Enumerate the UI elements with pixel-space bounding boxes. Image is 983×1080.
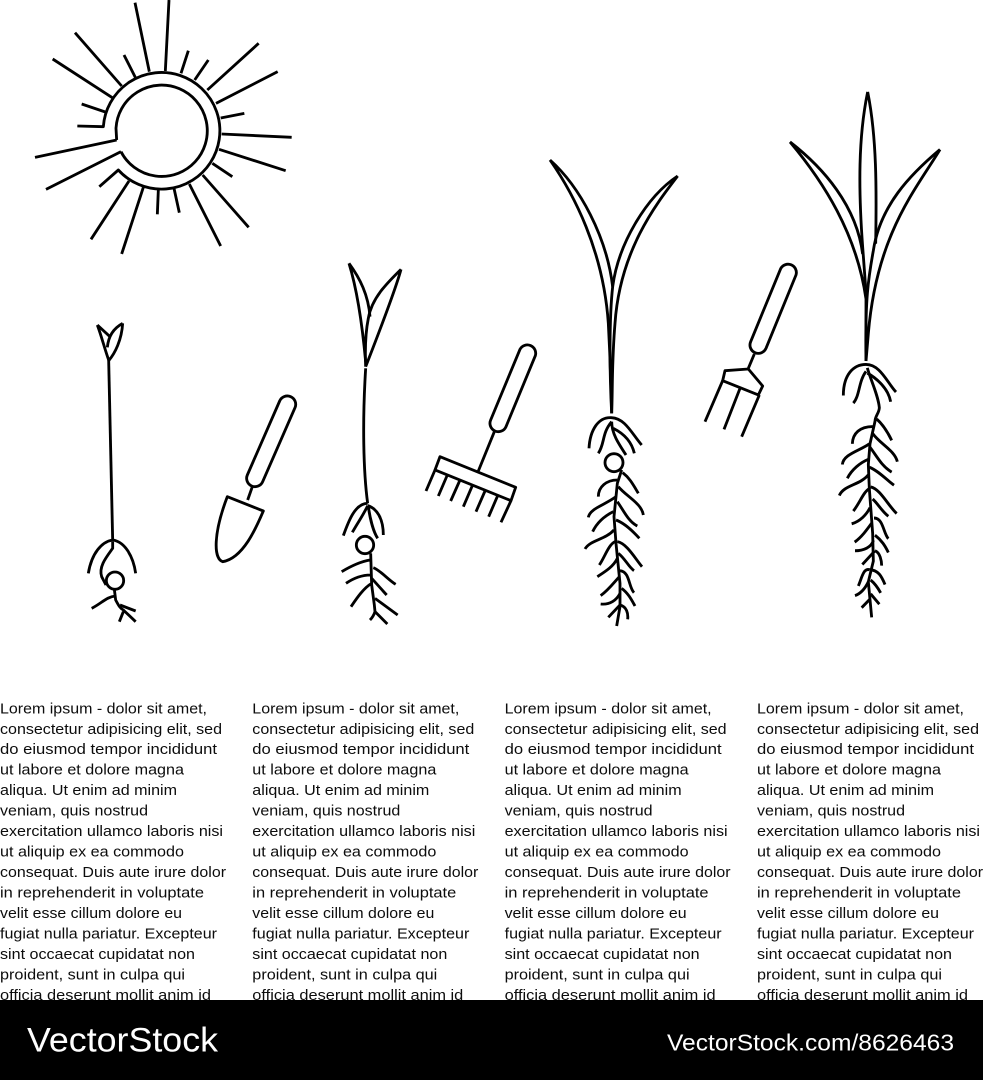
text block: column 4: do eiusmod tempor incididunt — [757, 741, 975, 758]
text block: column 4: consectetur adipisicing elit, sed — [757, 721, 979, 738]
text block: column 2: do eiusmod tempor incididunt — [252, 741, 470, 758]
text block: column 4: officia deserunt mollit anim id — [757, 987, 968, 1004]
text block: column 4: exercitation ullamco laboris nisi — [757, 823, 980, 840]
text block: column 1: do eiusmod tempor incididunt — [0, 741, 218, 758]
text block: column 1: ut aliquip ex ea commodo — [0, 844, 184, 860]
text block: column 1: Lorem ipsum - dolor sit amet, — [0, 700, 207, 717]
footer bar — [0, 1000, 983, 1080]
text block: column 1: in reprehenderit in voluptate — [0, 884, 204, 901]
text block: column 1: consectetur adipisicing elit, sed — [0, 721, 222, 738]
text block: column 1 — [0, 700, 226, 1004]
text block: column 4 — [757, 700, 983, 1004]
text block: column 1: proident, sunt in culpa qui — [0, 966, 185, 983]
text block: column 3: ut aliquip ex ea commodo — [505, 844, 689, 860]
text block: column 4: velit esse cillum dolore eu — [757, 905, 939, 922]
text block: column 3: veniam, quis nostrud — [505, 803, 653, 820]
icon: rake — [426, 345, 536, 522]
text block: column 3: ut labore et dolore magna — [505, 762, 689, 779]
text block: column 2: officia deserunt mollit anim id — [252, 987, 463, 1004]
text block: column 2: consectetur adipisicing elit, sed — [252, 721, 474, 738]
text block: column 3 — [505, 700, 731, 1004]
plant stage 3: long leaves and roots — [550, 160, 678, 626]
text block: column 4: veniam, quis nostrud — [757, 803, 905, 820]
plant stage 2: two leaves — [342, 263, 401, 624]
text block: column 2: sint occaecat cupidatat non — [252, 946, 447, 963]
text block: column 2: exercitation ullamco laboris nisi — [252, 823, 475, 840]
text block: column 1: exercitation ullamco laboris nisi — [0, 823, 223, 840]
text block: column 3: Lorem ipsum - dolor sit amet, — [505, 700, 712, 717]
text block: column 2: velit esse cillum dolore eu — [252, 905, 434, 922]
text block: column 3: fugiat nulla pariatur. Excepteur — [505, 925, 722, 942]
text block: column 2: Lorem ipsum - dolor sit amet, — [252, 700, 459, 717]
text block: column 2: proident, sunt in culpa qui — [252, 966, 437, 983]
icon: trowel — [216, 396, 296, 562]
text block: column 2: ut aliquip ex ea commodo — [252, 844, 436, 860]
text block: column 4: in reprehenderit in voluptate — [757, 884, 961, 901]
text block: column 3: in reprehenderit in voluptate — [505, 884, 709, 901]
text block: column 2: ut labore et dolore magna — [252, 762, 437, 779]
text block: column 3: proident, sunt in culpa qui — [505, 966, 690, 983]
text block: column 1: fugiat nulla pariatur. Excepteur — [0, 925, 217, 942]
icon: sun — [35, 0, 292, 254]
text block: column 2: in reprehenderit in voluptate — [252, 884, 456, 901]
text block: column 2: consequat. Duis aute irure dolor — [252, 864, 478, 881]
text block: column 2: fugiat nulla pariatur. Excepteur — [252, 925, 469, 942]
text block: column 1: ut labore et dolore magna — [0, 762, 185, 779]
footer image id: VectorStock.com/8626463 — [667, 1030, 954, 1056]
text block: column 1: aliqua. Ut enim ad minim — [0, 782, 177, 799]
text block: column 4: consequat. Duis aute irure dolor — [757, 864, 983, 881]
text block: column 4: sint occaecat cupidatat non — [757, 946, 952, 963]
text block: column 3: consequat. Duis aute irure dolor — [505, 864, 731, 881]
text block: column 3: aliqua. Ut enim ad minim — [505, 782, 682, 799]
footer logo: VectorStock — [27, 1022, 219, 1060]
text block: column 3: do eiusmod tempor incididunt — [505, 741, 723, 758]
text block: column 4: ut aliquip ex ea commodo — [757, 844, 941, 860]
text block: column 1: sint occaecat cupidatat non — [0, 946, 195, 963]
plant stage 1: seedling — [88, 323, 136, 622]
plant stage 4: three leaves and full roots — [790, 92, 940, 617]
icon: garden fork — [705, 264, 796, 437]
text block: column 1: consequat. Duis aute irure dolor — [0, 864, 226, 881]
text block: column 3: consectetur adipisicing elit, sed — [505, 721, 727, 738]
text block: column 4: fugiat nulla pariatur. Excepteur — [757, 925, 974, 942]
text block: column 2 — [252, 700, 478, 1004]
text block: column 3: sint occaecat cupidatat non — [505, 946, 700, 963]
text block: column 2: veniam, quis nostrud — [252, 803, 400, 820]
text block: column 4: Lorem ipsum - dolor sit amet, — [757, 700, 964, 717]
text block: column 1: veniam, quis nostrud — [0, 803, 148, 820]
text block: column 2: aliqua. Ut enim ad minim — [252, 782, 429, 799]
text block: column 4: proident, sunt in culpa qui — [757, 966, 942, 983]
text block: column 1: velit esse cillum dolore eu — [0, 905, 182, 922]
text block: column 3: exercitation ullamco laboris nisi — [505, 823, 728, 840]
text block: column 3: officia deserunt mollit anim id — [505, 987, 716, 1004]
text block: column 4: ut labore et dolore magna — [757, 762, 942, 779]
text block: column 1: officia deserunt mollit anim id — [0, 987, 211, 1004]
text block: column 3: velit esse cillum dolore eu — [505, 905, 687, 922]
text block: column 4: aliqua. Ut enim ad minim — [757, 782, 934, 799]
